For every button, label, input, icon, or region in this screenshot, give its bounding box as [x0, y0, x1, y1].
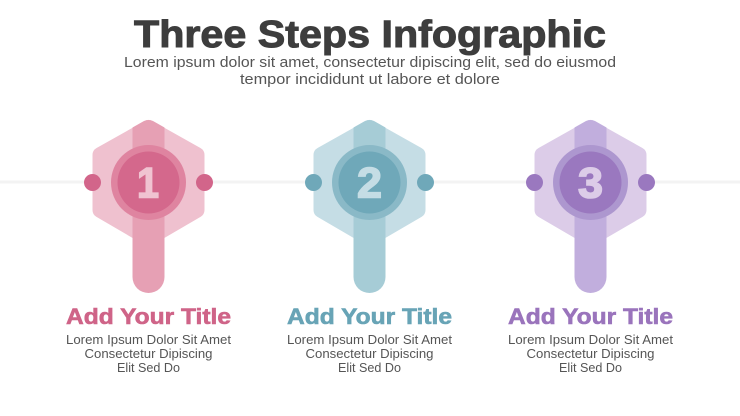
hexagon	[542, 128, 638, 238]
stem	[574, 120, 606, 293]
panel: step 1	[66, 120, 232, 375]
number 3: 3	[578, 160, 603, 208]
step 1 description: Lorem Ipsum Dolor Sit Amet	[66, 333, 232, 347]
step 3 description: Lorem Ipsum Dolor Sit Amet	[508, 333, 674, 347]
left dot	[84, 174, 101, 191]
step 2 description	[287, 333, 453, 375]
left dot	[526, 174, 543, 191]
stem	[132, 120, 164, 293]
step 2 description: Consectetur Dipiscing	[306, 347, 434, 361]
number 1: 1	[137, 160, 159, 208]
step 1 heading: Add Your Title	[66, 304, 231, 329]
right dot	[417, 174, 434, 191]
panel: step 2	[287, 120, 453, 375]
inner circle	[560, 152, 622, 214]
step 3 description: Consectetur Dipiscing	[526, 347, 655, 361]
step 2 description: Elit Sed Do	[338, 361, 401, 375]
subtitle: Lorem ipsum dolor sit amet, consectetur dipiscing elit, sed do eiusmod	[124, 55, 616, 71]
subtitle	[124, 55, 616, 88]
stem	[354, 120, 386, 293]
left dot	[305, 174, 322, 191]
inner circle	[118, 152, 180, 214]
step 3 heading: Add Your Title	[508, 304, 673, 329]
step 2 description: Lorem Ipsum Dolor Sit Amet	[287, 333, 453, 347]
right dot	[196, 174, 213, 191]
number 2: 2	[357, 160, 382, 208]
step 3 description	[508, 333, 674, 375]
outer ring	[111, 145, 186, 220]
step 1 description: Elit Sed Do	[117, 361, 180, 375]
subtitle: tempor incididunt ut labore et dolore	[240, 72, 500, 88]
outer ring	[553, 145, 628, 220]
hexagon	[322, 128, 418, 238]
right dot	[638, 174, 655, 191]
inner circle	[338, 152, 400, 214]
outer ring	[332, 145, 407, 220]
step 1 description	[66, 333, 232, 375]
title: Three Steps Infographic	[134, 14, 606, 56]
step 3 description: Elit Sed Do	[559, 361, 622, 375]
panel: step 3	[508, 120, 674, 375]
hexagon	[100, 128, 196, 238]
step 2 heading: Add Your Title	[287, 304, 452, 329]
step 1 description: Consectetur Dipiscing	[84, 347, 213, 361]
